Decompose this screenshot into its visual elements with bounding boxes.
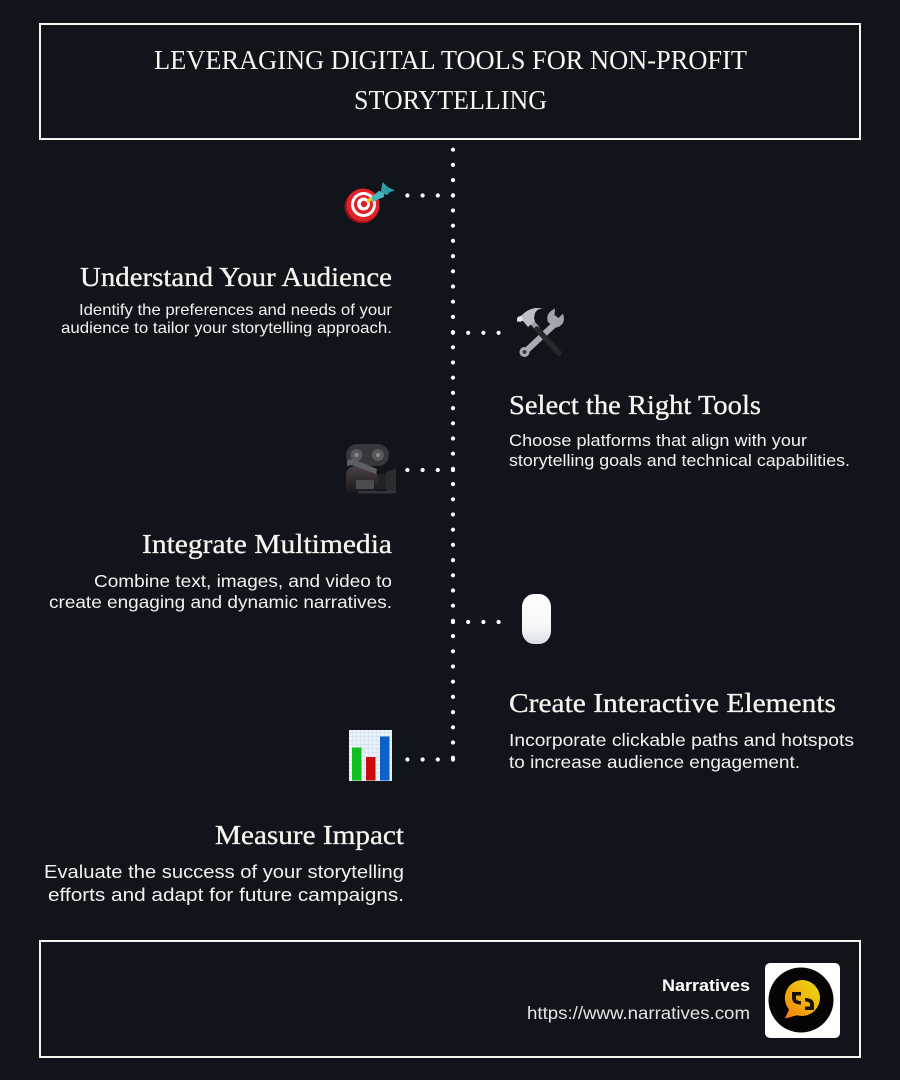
text block: Combine text, images, and video to — [94, 571, 392, 591]
heading: Understand Your Audience — [80, 262, 392, 292]
text block: Identify the preferences and needs of your — [79, 302, 393, 319]
title: LEVERAGING DIGITAL TOOLS FOR NON-PROFIT — [154, 45, 747, 75]
icon: movie camera — [346, 444, 396, 494]
step 5: measure impact — [44, 730, 405, 905]
logo — [765, 963, 840, 1038]
panel: title box — [40, 24, 860, 139]
text block — [509, 730, 854, 772]
text block: audience to tailor your storytelling approach. — [61, 320, 392, 337]
footer url: https://www.narratives.com — [527, 1003, 750, 1023]
footer brand name: Narratives — [662, 976, 750, 995]
icon: dart and target — [344, 182, 395, 223]
timeline: dotted connector lines — [407, 150, 499, 762]
step 4: create interactive elements — [509, 594, 854, 772]
text block: Evaluate the success of your storytelling — [44, 861, 404, 882]
icon: computer mouse — [522, 594, 551, 644]
panel: footer — [40, 941, 860, 1057]
text block: storytelling goals and technical capabilities. — [509, 451, 850, 470]
text block — [61, 302, 393, 337]
title — [154, 45, 747, 115]
icon: hammer and wrench — [517, 308, 564, 357]
step 2: select the right tools — [509, 308, 850, 470]
text block: Choose platforms that align with your — [509, 431, 807, 450]
step 1: understand your audience — [61, 182, 395, 337]
title: STORYTELLING — [354, 85, 547, 115]
text block — [44, 861, 404, 905]
text block — [509, 431, 850, 470]
text block: efforts and adapt for future campaigns. — [48, 884, 404, 905]
step 3: integrate multimedia — [49, 444, 396, 612]
heading: Select the Right Tools — [509, 390, 761, 420]
text block: to increase audience engagement. — [509, 752, 800, 772]
heading: Measure Impact — [215, 820, 405, 850]
heading: Integrate Multimedia — [142, 529, 392, 559]
text block: create engaging and dynamic narratives. — [49, 592, 392, 612]
text block: Incorporate clickable paths and hotspots — [509, 730, 854, 750]
text block — [49, 571, 392, 612]
heading: Create Interactive Elements — [509, 688, 836, 718]
icon: bar chart — [349, 730, 392, 781]
